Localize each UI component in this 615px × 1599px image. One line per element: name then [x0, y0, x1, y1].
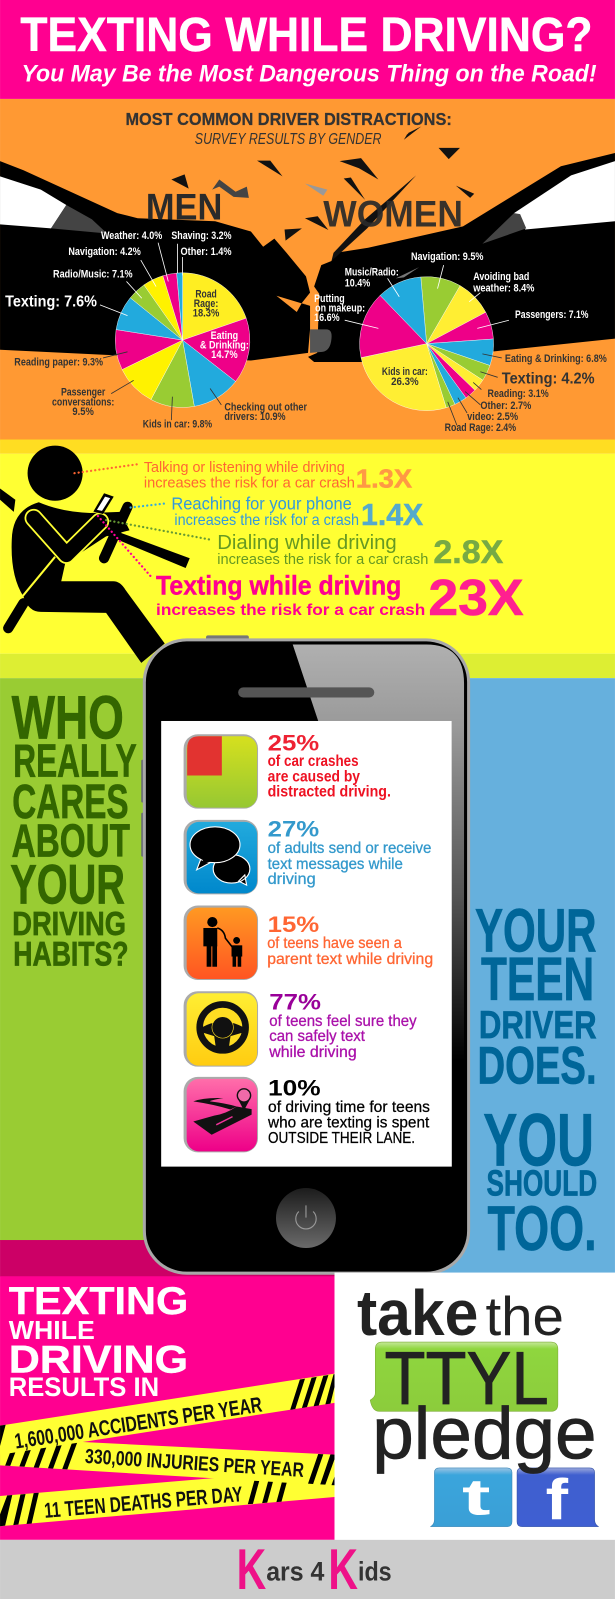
chart labels: men: 18.3%: [193, 308, 220, 320]
heading: texting while driving results in: [9, 1280, 188, 1402]
heading: texting while driving results in: WHILE: [9, 1317, 95, 1345]
stat: teens see parents: [184, 906, 433, 980]
illustration: flying shards: [171, 126, 474, 261]
text: pledge: pledge: [372, 1392, 597, 1474]
chart labels: men: Eating: [211, 330, 238, 342]
chart labels: men: Radio/Music: 7.1%: [53, 268, 133, 280]
text block: who really cares: REALLY: [13, 734, 137, 786]
logo: Kars 4 Kids: ars 4: [266, 1557, 325, 1587]
icon: speech bubbles: [184, 820, 258, 894]
tape: injuries: 330,000 INJURIES PER YEAR: [84, 1446, 305, 1482]
chart labels: men: conversations:: [52, 396, 114, 408]
chart labels: women: Passengers: 7.1%: [515, 309, 589, 321]
text block: texting risk: 23X: [428, 569, 524, 626]
stat: teens see parents: parent text while driving: [267, 951, 433, 968]
icon: quarter square: [184, 734, 258, 809]
text block: who really cares: CARES: [12, 776, 129, 829]
chart labels: women: 26.3%: [391, 376, 419, 388]
stat: out of lane: [184, 1076, 430, 1152]
panel: footer: [0, 1538, 615, 1599]
illustration: left car: [0, 161, 310, 360]
subtitle: You May Be the Most Dangerous Thing on the Road!: [21, 61, 597, 88]
text block: your teen driver does: [475, 896, 597, 1264]
label: MEN: MEN: [146, 186, 222, 227]
icon: steering wheel: [184, 991, 258, 1067]
stat: teens feel safe: while driving: [268, 1044, 357, 1061]
tape: injuries: [0, 1438, 335, 1486]
text block: dialing risk: increases the risk for a car crash: [217, 552, 428, 568]
text block: who really cares: WHO: [12, 683, 124, 751]
text block: who really cares: HABITS?: [13, 935, 129, 973]
logo: Kars 4 Kids: ids: [358, 1557, 392, 1587]
text block: texting risk: increases the risk for a car crash: [156, 602, 425, 619]
stat: adults text: [184, 817, 432, 894]
logo: Kars 4 Kids: [237, 1538, 392, 1599]
stat: out of lane: OUTSIDE THEIR LANE.: [268, 1130, 415, 1147]
panel: crash risk by activity: [0, 446, 524, 663]
icon: twitter: t: [462, 1468, 491, 1525]
chart labels: women: Putting: [314, 293, 345, 305]
speech bubble: TTYL: TTYL: [384, 1336, 549, 1420]
chart labels: women: weather: 8.4%: [472, 283, 535, 295]
chart labels: men: Reading paper: 9.3%: [14, 357, 103, 369]
icon: parent and child: [184, 906, 258, 980]
text block: reaching risk: 1.4X: [361, 498, 424, 532]
chart labels: men: Texting: 7.6%: [5, 294, 97, 311]
stat: teens feel safe: of teens feel sure they: [269, 1013, 417, 1030]
heading: most common distractions: MOST COMMON DRIVER DISTRACTIONS:: [125, 109, 452, 129]
stat: adults text: driving: [268, 871, 316, 888]
chart labels: men: Passenger: [61, 387, 105, 399]
icon: driver silhouette: [0, 446, 190, 663]
text block: texting risk: Texting while driving: [156, 571, 401, 601]
text block: talking risk: [144, 460, 412, 493]
stat: crashes: are caused by: [268, 769, 360, 786]
chart labels: women: Avoiding bad: [473, 271, 529, 283]
text block: reaching risk: [171, 493, 424, 532]
heading: texting while driving results in: RESULTS IN: [9, 1372, 159, 1402]
stat: out of lane: who are texting is spent: [267, 1114, 430, 1131]
chart labels: men: Checking out other: [224, 401, 307, 413]
tape: teen deaths: 11 TEEN DEATHS PER DAY: [43, 1482, 243, 1523]
text block: dialing risk: 2.8X: [433, 533, 504, 570]
icon: facebook: f: [546, 1468, 569, 1532]
chart: men pie: [115, 273, 250, 407]
text block: who really cares: [10, 683, 137, 973]
chart labels: men: [5, 230, 307, 430]
stat: teens see parents: of teens have seen a: [267, 935, 402, 952]
chart labels: women: Texting: 4.2%: [502, 370, 595, 387]
stat: crashes: of car crashes: [268, 753, 359, 770]
chart: women pie: [360, 277, 494, 411]
chart labels: women: 10.4%: [345, 278, 371, 290]
chart labels: men: Other: 1.4%: [181, 246, 232, 258]
text block: talking risk: increases the risk for a car crash: [144, 475, 355, 491]
stat: adults text: 27%: [268, 817, 319, 842]
text block: talking risk: Talking or listening while driving: [144, 460, 345, 476]
chart labels: women: Road Rage: 2.4%: [445, 422, 516, 434]
panel: results: [0, 1276, 335, 1540]
chart labels: men: Navigation: 4.2%: [68, 246, 141, 258]
chart labels: women: Reading: 3.1%: [487, 388, 549, 400]
subheading: survey results: SURVEY RESULTS BY GENDER: [195, 131, 381, 148]
text block: dialing risk: [217, 532, 504, 570]
chart labels: men: Road: [195, 288, 217, 300]
text block: dialing risk: Dialing while driving: [217, 532, 397, 554]
chart labels: women: [314, 251, 607, 434]
label: WOMEN: WOMEN: [323, 193, 463, 234]
text block: talking risk: 1.3X: [356, 465, 412, 493]
text block: who really cares: ABOUT: [12, 815, 130, 867]
tape: accidents: 1,600,000 ACCIDENTS PER YEAR: [13, 1393, 264, 1454]
chart labels: women: Music/Radio:: [345, 266, 399, 278]
icon: facebook: [517, 1468, 599, 1532]
icon: road and pin: [184, 1077, 258, 1152]
illustration: right car: [308, 153, 615, 362]
panel: header: [0, 0, 615, 99]
chart labels: women: Other: 2.7%: [480, 400, 532, 412]
stat: crashes: distracted driving.: [268, 783, 391, 800]
icon: twitter: [430, 1468, 512, 1527]
stat: adults text: of adults send or receive: [268, 840, 432, 857]
text block: who really cares: DRIVING: [12, 906, 126, 943]
home button: [276, 1188, 336, 1248]
stat: adults text: text messages while: [268, 856, 403, 873]
chart labels: men: Rage:: [194, 298, 218, 310]
text block: reaching risk: increases the risk for a crash: [174, 512, 359, 529]
screen: [161, 721, 452, 1167]
chart labels: men: Weather: 4.0%: [101, 230, 163, 242]
tape: teen deaths: [0, 1468, 335, 1526]
chart labels: women: on makeup:: [315, 303, 365, 315]
chart labels: men: Kids in car: 9.8%: [143, 418, 213, 430]
chart labels: women: video: 2.5%: [467, 411, 519, 423]
stat: out of lane: of driving time for teens: [268, 1099, 430, 1116]
heading: texting while driving results in: DRIVING: [9, 1339, 188, 1382]
chart labels: men: 14.7%: [211, 349, 238, 361]
chart labels: men: drivers: 10.9%: [224, 411, 286, 423]
stat: teens feel safe: 77%: [269, 990, 321, 1015]
text block: reaching risk: Reaching for your phone: [171, 493, 352, 513]
text block: who really cares: YOUR: [10, 853, 125, 916]
chart labels: men: Shaving: 3.2%: [171, 230, 232, 242]
panel: pledge: [335, 1273, 615, 1540]
speaker: [238, 687, 374, 698]
stat: teens feel safe: [184, 990, 417, 1067]
stat: crashes: [184, 731, 391, 809]
stat: out of lane: 10%: [268, 1076, 321, 1101]
panel: pledge: the: [485, 1285, 564, 1347]
chart labels: women: Kids in car:: [382, 366, 428, 378]
heading: texting while driving results in: TEXTING: [9, 1280, 188, 1323]
text block: texting risk: [156, 569, 524, 626]
stat: crashes: 25%: [268, 731, 319, 756]
chart labels: men: & Drinking:: [200, 340, 249, 352]
dotted leader lines: [74, 464, 212, 577]
stat: teens feel safe: can safely text: [269, 1028, 365, 1045]
text: take the: take: [357, 1277, 478, 1349]
stat: teens see parents: 15%: [268, 912, 319, 937]
chart labels: women: 16.6%: [314, 312, 340, 324]
chart labels: men: 9.5%: [72, 406, 94, 418]
panel: driver distractions survey: [0, 109, 615, 434]
chart labels: women: Navigation: 9.5%: [411, 251, 484, 263]
panel: smartphone: [141, 635, 470, 1275]
